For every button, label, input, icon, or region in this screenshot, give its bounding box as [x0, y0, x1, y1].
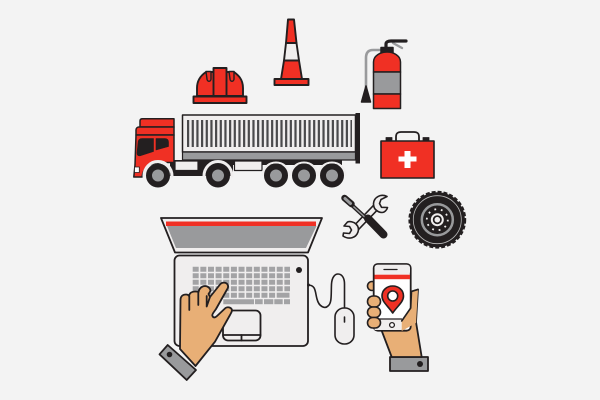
chassis: [170, 160, 342, 176]
top finger: [368, 282, 376, 290]
truck cab: [134, 119, 174, 177]
mouse and cable: [307, 274, 354, 344]
laptop base: [174, 256, 308, 346]
wheels: [144, 162, 346, 184]
storage boxes: [175, 161, 262, 170]
phone cuff: [390, 357, 428, 371]
truck: [134, 113, 360, 184]
camera dot: [296, 267, 302, 273]
icon: traffic cone: [274, 20, 308, 85]
screwdriver: [344, 198, 384, 234]
hand holding phone: [368, 264, 428, 371]
container trailer: [182, 113, 360, 164]
palm: [376, 290, 422, 357]
finger lines: [189, 292, 210, 310]
hand on laptop: [160, 283, 232, 380]
fingers: [368, 296, 380, 328]
icon: first aid kit: [381, 132, 434, 178]
icon: hard hat: [194, 68, 246, 103]
keyboard: [193, 269, 290, 302]
wrench: [343, 195, 388, 238]
touchpad: [223, 310, 260, 340]
location pin: [382, 286, 404, 313]
icon: tyre: [409, 192, 465, 248]
shirt cuff: [160, 345, 196, 380]
icon: wrench and screwdriver: [343, 195, 388, 238]
hand: [180, 283, 232, 366]
thumb outline: [402, 290, 418, 321]
thumb: [402, 290, 418, 331]
laptop: [161, 218, 322, 346]
phone body: [374, 264, 411, 331]
icon: fire extinguisher: [362, 41, 406, 108]
laptop screen: [161, 218, 322, 252]
